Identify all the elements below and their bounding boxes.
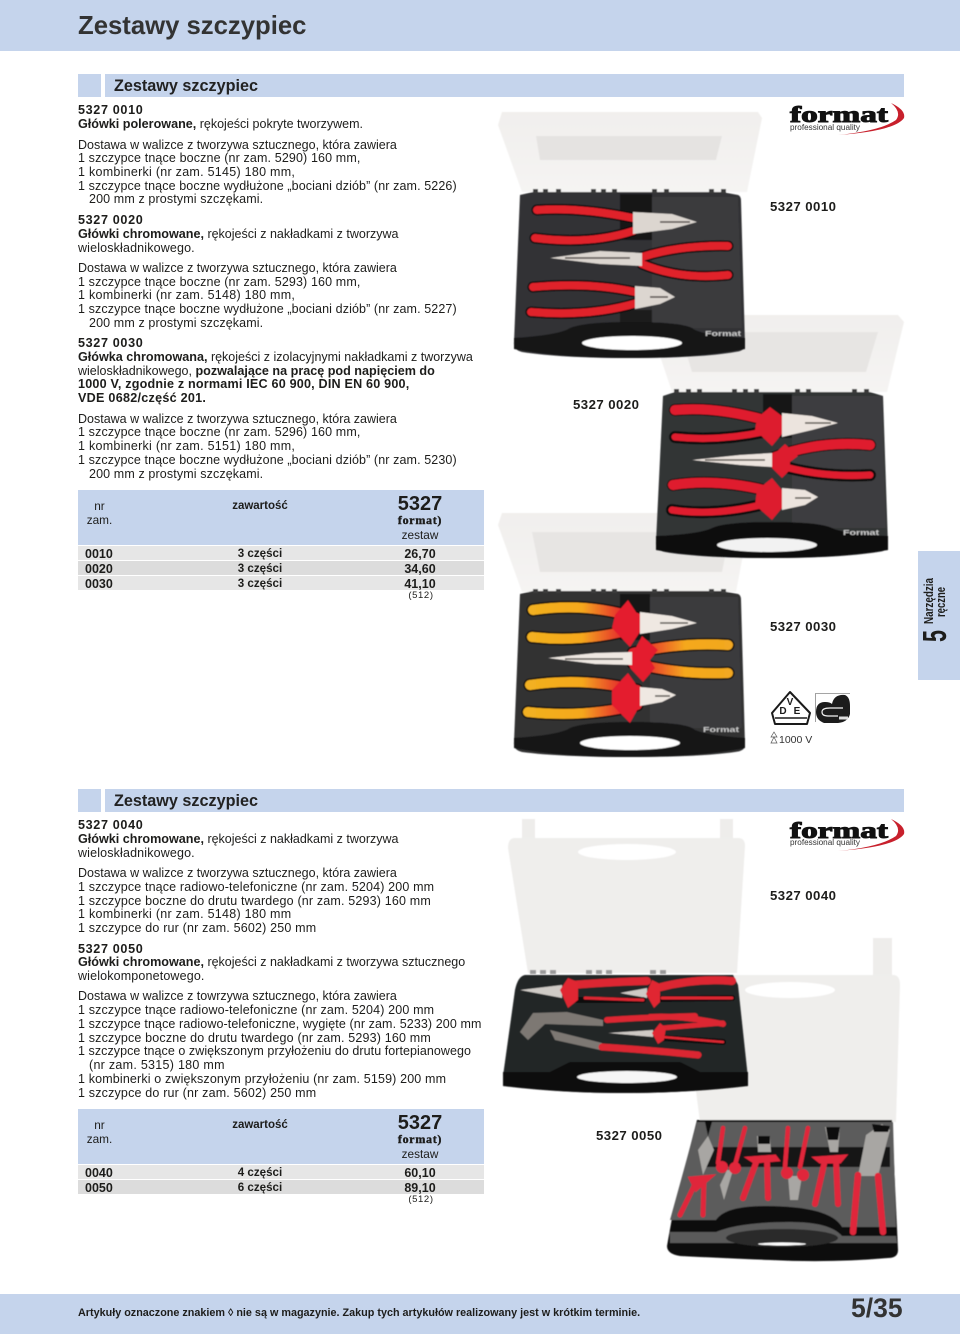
text block: sets 0010 to 0030: wieloskładnikowego, pozwalające na pracę pod napięciem do (78, 364, 435, 378)
text block: sets 0010 to 0030: 1 kombinerki (nr zam. 5148) 180 mm, (78, 288, 295, 302)
text block: sets 0010 to 0030: Główki chromowane, rękojeści z nakładkami z tworzywa (78, 227, 398, 241)
voltage label: 1000 V (779, 734, 812, 746)
page title: Zestawy szczypiec (78, 12, 306, 40)
price table 2: format) (398, 1132, 442, 1146)
text block: sets 0010 to 0030: Dostawa w walizce z tworzywa sztucznego, która zawiera (78, 412, 397, 426)
text block: sets 0010 to 0030: 200 mm z prostymi szczękami. (89, 192, 263, 206)
text block: sets 0040 and 0050: 1 kombinerki (nr zam. 5148) 180 mm (78, 907, 291, 921)
photo: case 5327 0010 (498, 112, 762, 358)
text block: sets 0040 and 0050: Dostawa w walizce z towrzywa sztucznego, która zawiera (78, 989, 397, 1003)
price table 2: nr (94, 1118, 105, 1132)
section heading bar 2 (78, 789, 904, 812)
photo: case 5327 0030: Format (703, 727, 740, 734)
text block: sets 0010 to 0030: Dostawa w walizce z tworzywa sztucznego, która zawiera (78, 138, 397, 152)
logo: format: format (790, 102, 888, 127)
text block: sets 0010 to 0030: 1 szczypce tnące boczne wydłużone „bociani dziób” (nr zam. 5226) (78, 179, 457, 193)
price table 1: zestaw (402, 528, 438, 542)
text block: sets 0040 and 0050: Główki chromowane, rękojeści z nakładkami z tworzywa (78, 832, 398, 846)
text block: sets 0010 to 0030: Główki polerowane, rękojeści pokryte tworzywem. (78, 117, 363, 131)
section heading bar 2: Zestawy szczypiec (114, 792, 258, 810)
text block: sets 0040 and 0050: 1 szczypce tnące o zwiększonym przyłożeniu do drutu fortepianowego (78, 1044, 471, 1058)
text block: sets 0040 and 0050: 1 szczypce do rur (nr zam. 5602) 250 mm (78, 1086, 316, 1100)
section heading bar 1 (78, 74, 904, 97)
text block: sets 0010 to 0030: 200 mm z prostymi szczękami. (89, 467, 263, 481)
price table 1: 0010 (85, 547, 113, 561)
price table 2: zam. (87, 1132, 112, 1146)
text block: sets 0010 to 0030: 1000 V, zgodnie z normami IEC 60 900, DIN EN 60 900, (78, 377, 409, 391)
text block: sets 0040 and 0050: Dostawa w walizce z tworzywa sztucznego, która zawiera (78, 866, 397, 880)
icon: VDE mark: E (794, 706, 801, 717)
text block: sets 0040 and 0050: 1 szczypce do rur (nr zam. 5602) 250 mm (78, 921, 316, 935)
text block: sets 0010 to 0030: 5327 0030 (78, 336, 143, 350)
text block: sets 0010 to 0030: 1 szczypce tnące boczne (nr zam. 5293) 160 mm, (78, 275, 360, 289)
photo: case 5327 0040 (503, 819, 748, 1093)
price table 1: 3 części (238, 562, 282, 575)
price table 1: zam. (87, 513, 112, 527)
price table 2: zawartość (232, 1119, 288, 1131)
text block: sets 0040 and 0050 (78, 818, 482, 1100)
page number: 5/35 (851, 1293, 903, 1323)
text block: sets 0010 to 0030: 1 szczypce tnące boczne (nr zam. 5290) 160 mm, (78, 151, 360, 165)
price table 1: (512) (408, 590, 434, 601)
price table 2: 0040 (85, 1166, 113, 1180)
text block: sets 0010 to 0030: Dostawa w walizce z tworzywa sztucznego, która zawiera (78, 261, 397, 275)
photo: case 5327 0050 (667, 938, 900, 1261)
text block: sets 0010 to 0030: VDE 0682/część 201. (78, 391, 206, 405)
price table 1: 3 części (238, 547, 282, 560)
logo: format (790, 102, 904, 135)
text block: sets 0010 to 0030 (78, 103, 473, 481)
product label 0010: 5327 0010 (770, 199, 836, 214)
product label 0030: 5327 0030 (770, 619, 836, 634)
text block: sets 0010 to 0030: 1 kombinerki (nr zam. 5151) 180 mm, (78, 439, 295, 453)
text block: sets 0010 to 0030: 5327 0020 (78, 213, 143, 227)
text block: sets 0010 to 0030: wieloskładnikowego. (78, 241, 195, 255)
price table 1 (78, 490, 484, 601)
product label 0020: 5327 0020 (573, 397, 639, 412)
price table 2: zestaw (402, 1147, 438, 1161)
text block: sets 0010 to 0030: Główka chromowana, rękojeści z izolacyjnymi nakładkami z tworzywa (78, 350, 473, 364)
price table 2: (512) (408, 1194, 434, 1205)
text block: sets 0010 to 0030: 1 szczypce tnące boczne wydłużone „bociani dziób” (nr zam. 5227) (78, 302, 457, 316)
text block: sets 0040 and 0050: Główki chromowane, rękojeści z nakładkami z tworzywa sztucznego (78, 955, 465, 969)
photo: case 5327 0030 (498, 513, 750, 757)
price table 2 (78, 1109, 484, 1205)
logo: format: format (790, 818, 888, 843)
price table 1: 3 części (238, 577, 282, 590)
icon: VDE mark (772, 692, 810, 724)
price table 1: 5327 (398, 493, 442, 515)
photo: case 5327 0020 (650, 315, 904, 558)
price table 1: format) (398, 513, 442, 527)
text block: sets 0040 and 0050: 1 szczypce tnące radiowo-telefoniczne (nr zam. 5204) 200 mm (78, 1003, 434, 1017)
photo: case 5327 0020: Format (843, 530, 880, 537)
text block: sets 0040 and 0050: 1 szczypce tnące radiowo-telefoniczne, wygięte (nr zam. 5233) 200 mm (78, 1017, 482, 1031)
price table 2: 6 części (238, 1181, 282, 1194)
text block: sets 0010 to 0030: 1 kombinerki (nr zam. 5145) 180 mm, (78, 165, 295, 179)
price table 1: 0020 (85, 562, 113, 576)
top title band (0, 0, 960, 51)
price table 1: 0030 (85, 577, 113, 591)
side tab: chapter 5 (918, 551, 960, 680)
text block: sets 0040 and 0050: 1 szczypce boczne do drutu twardego (nr zam. 5293) 160 mm (78, 1031, 431, 1045)
price table 2: 0050 (85, 1181, 113, 1195)
text block: sets 0040 and 0050: (nr zam. 5315) 180 mm (89, 1058, 225, 1072)
text block: sets 0040 and 0050: wielokomponetowego. (78, 969, 205, 983)
side tab: chapter 5: ręczne (934, 587, 948, 617)
section heading bar 1: Zestawy szczypiec (114, 77, 258, 95)
text block: sets 0010 to 0030: 5327 0010 (78, 103, 143, 117)
text block: sets 0040 and 0050: 1 szczypce boczne do drutu twardego (nr zam. 5293) 160 mm (78, 894, 431, 908)
price table 1: 26,70 (404, 547, 436, 561)
price table 2: 89,10 (404, 1181, 436, 1195)
text block: sets 0010 to 0030: 200 mm z prostymi szczękami. (89, 316, 263, 330)
product label 0040: 5327 0040 (770, 888, 836, 903)
logo: format: professional quality (790, 838, 860, 847)
footer note: Artykuły oznaczone znakiem ◊ nie są w magazynie. Zakup tych artykułów realizowany jest w krótkim terminie. (78, 1307, 640, 1319)
footer band (0, 1294, 960, 1334)
text block: sets 0040 and 0050: 1 kombinerki o zwiększonym przyłożeniu (nr zam. 5159) 200 mm (78, 1072, 446, 1086)
price table 1: 34,60 (404, 562, 436, 576)
text block: sets 0040 and 0050: wieloskładnikowego. (78, 846, 195, 860)
price table 1: zawartość (232, 500, 288, 512)
icon: insulation triangles (771, 732, 777, 743)
price table 2: 60,10 (404, 1166, 436, 1180)
text block: sets 0010 to 0030: 1 szczypce tnące boczne (nr zam. 5296) 160 mm, (78, 425, 360, 439)
icon: VDE mark: D (779, 706, 787, 717)
product label 0050: 5327 0050 (596, 1128, 662, 1143)
text block: sets 0040 and 0050: 5327 0040 (78, 818, 143, 832)
icon: GS mark (816, 694, 850, 723)
side tab: chapter 5: Narzędzia (922, 577, 936, 624)
text block: sets 0010 to 0030: 1 szczypce tnące boczne wydłużone „bociani dziób” (nr zam. 5230) (78, 453, 457, 467)
price table 1: nr (94, 499, 105, 513)
text block: sets 0040 and 0050: 1 szczypce tnące radiowo-telefoniczne (nr zam. 5204) 200 mm (78, 880, 434, 894)
icon: VDE mark: V (787, 697, 794, 708)
logo: format: professional quality (790, 123, 860, 132)
price table 2: 4 części (238, 1166, 282, 1179)
logo: format (790, 818, 904, 851)
text block: sets 0040 and 0050: 5327 0050 (78, 942, 143, 956)
price table 2: 5327 (398, 1112, 442, 1134)
photo: case 5327 0010: Format (705, 331, 742, 338)
price table 1: 41,10 (404, 577, 436, 591)
